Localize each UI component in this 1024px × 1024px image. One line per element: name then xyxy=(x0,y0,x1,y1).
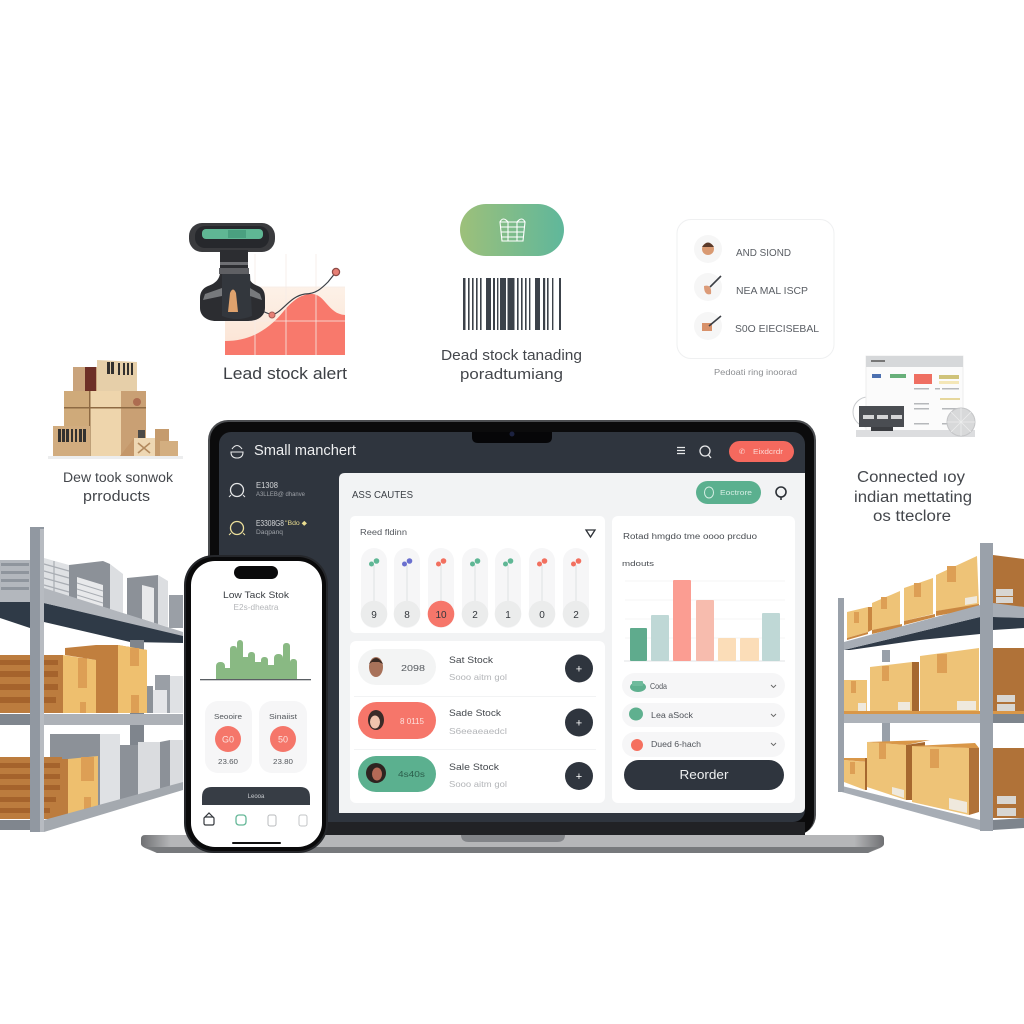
row: sale stock: Sooo aitm gol xyxy=(449,779,507,789)
stat card right: 50 xyxy=(278,734,288,744)
row: sade stock: S6eeaeaedcl xyxy=(449,726,507,736)
row: sade stock: Sade Stock xyxy=(449,708,501,719)
row: sat stock: Sooo aitm gol xyxy=(449,672,507,682)
panel: bar chart card xyxy=(612,516,795,803)
bar chart xyxy=(624,580,785,661)
legend row: dead stock xyxy=(622,732,785,757)
contact row 1 xyxy=(694,235,791,263)
dynamic island xyxy=(234,566,278,579)
row: sale stock: + xyxy=(576,771,582,783)
panel: contacts card xyxy=(677,220,834,358)
row: sale stock xyxy=(358,756,593,792)
button: green status pill xyxy=(696,481,761,504)
slider columns: 0 xyxy=(539,610,545,621)
sidebar: Daqpanq xyxy=(256,529,283,536)
legend row: lead stock xyxy=(622,703,785,727)
button: coral header button xyxy=(729,441,794,462)
laptop lid xyxy=(208,420,816,835)
button: green status pill: Eoctrore xyxy=(720,490,752,497)
label: dead stock xyxy=(441,348,582,383)
phone nav icons xyxy=(204,813,307,826)
row: sat stock: + xyxy=(576,664,582,676)
button: reorder: Reorder xyxy=(680,768,728,782)
slider columns: 2 xyxy=(472,610,478,621)
chart: stock curve xyxy=(225,254,345,355)
stat card right: Sinaiist xyxy=(269,712,298,721)
contact row 3: S0O EIECISEBAL xyxy=(735,323,819,335)
caption: contacts: Pedoati ring inoorad xyxy=(714,367,797,377)
laptop xyxy=(141,420,884,853)
stat card left: Seooire xyxy=(214,712,242,721)
slider columns: 9 xyxy=(371,610,377,621)
panel: bar chart card: mdouts xyxy=(622,559,654,568)
icon: green pill with basket xyxy=(460,204,564,256)
label: dead stock: Dead stock tanading xyxy=(441,348,582,364)
label: connected: indian mettating xyxy=(854,489,972,506)
right warehouse shelf xyxy=(838,543,1024,831)
label: dead stock: poradtumiang xyxy=(460,367,563,383)
icon: pin xyxy=(776,487,786,500)
phone xyxy=(184,555,328,853)
scanner body xyxy=(189,223,275,321)
stat card right xyxy=(259,701,307,773)
row: sale stock: 4s40s xyxy=(398,769,425,779)
contact row 2: NEA MAL ISCP xyxy=(736,285,808,297)
contact row 3 xyxy=(694,312,819,340)
stat card left xyxy=(205,701,252,773)
legend row: core: Coda xyxy=(650,681,667,691)
phone title xyxy=(223,590,290,612)
camera notch xyxy=(472,432,552,443)
contact row 1: AND SIOND xyxy=(736,247,791,259)
laptop base xyxy=(141,835,884,853)
phone title: Low Tack Stok xyxy=(223,590,290,600)
label: connected xyxy=(854,469,972,525)
main content panel xyxy=(339,473,805,813)
label: dew stock products: Dew took sonwok xyxy=(63,470,173,485)
left warehouse shelf xyxy=(0,527,183,832)
sidebar xyxy=(229,481,307,536)
row: sat stock: 2098 xyxy=(401,663,425,673)
label: lead stock alert: Lead stock alert xyxy=(223,364,347,383)
panel: bar chart card: Rotad hmgdo tme oooo prcduo xyxy=(623,532,758,541)
label: connected: Connected ıoy xyxy=(857,469,965,486)
slider columns: 2 xyxy=(573,610,579,621)
phone dark button: Leooa xyxy=(248,794,265,800)
legend row: core xyxy=(622,673,785,698)
sidebar: "Bdo ◆ xyxy=(285,520,307,527)
phone title: E2s-dheatra xyxy=(234,603,279,612)
slider columns: 8 xyxy=(404,610,410,621)
panel: slider card: Reed fldinn xyxy=(360,528,407,537)
row: sade stock: + xyxy=(576,718,582,730)
row: sat stock xyxy=(358,649,593,685)
row: sat stock: Sat Stock xyxy=(449,655,493,666)
row: sade stock: 8 0115 xyxy=(400,716,424,726)
stat card left: G0 xyxy=(222,734,234,744)
slider columns: 1 xyxy=(505,610,511,621)
home indicator xyxy=(232,842,281,844)
main content panel: ASS CAUTES xyxy=(352,489,413,501)
stat card right: 23.80 xyxy=(273,757,293,766)
panel: slider card xyxy=(350,516,605,633)
icon: barcode xyxy=(463,278,561,330)
label: connected: os tteclore xyxy=(873,508,951,525)
legend row: dead stock: Dued 6-hach xyxy=(651,740,701,749)
sidebar: A3LLEB@ dhanve xyxy=(256,491,305,498)
contact row 2 xyxy=(694,273,808,301)
icon: barcode scanner with stock chart xyxy=(189,223,345,355)
phone dark button xyxy=(202,787,310,805)
slider columns xyxy=(361,548,589,628)
slider columns: 10 xyxy=(435,610,447,621)
legend row: lead stock: Lea aSock xyxy=(651,711,694,720)
panel: stock list xyxy=(350,641,605,803)
row: sade stock xyxy=(358,702,593,739)
button: reorder xyxy=(624,760,784,790)
phone bar chart xyxy=(200,640,311,680)
sidebar: E1308 xyxy=(256,481,279,490)
label: dew stock products: prroducts xyxy=(83,488,150,505)
label: dew stock products xyxy=(63,470,173,505)
row: sale stock: Sale Stock xyxy=(449,762,499,773)
stat card left: 23.60 xyxy=(218,757,238,766)
app header: Small manchert xyxy=(254,443,356,459)
sidebar: E3308G8 xyxy=(256,519,284,528)
icon: stack of cardboard boxes xyxy=(48,360,183,459)
button: coral header button: ✆ xyxy=(739,447,745,456)
app header xyxy=(231,441,794,462)
button: coral header button: Eixdcrdr xyxy=(753,447,784,456)
icon: mini dashboard illustration xyxy=(853,356,975,437)
